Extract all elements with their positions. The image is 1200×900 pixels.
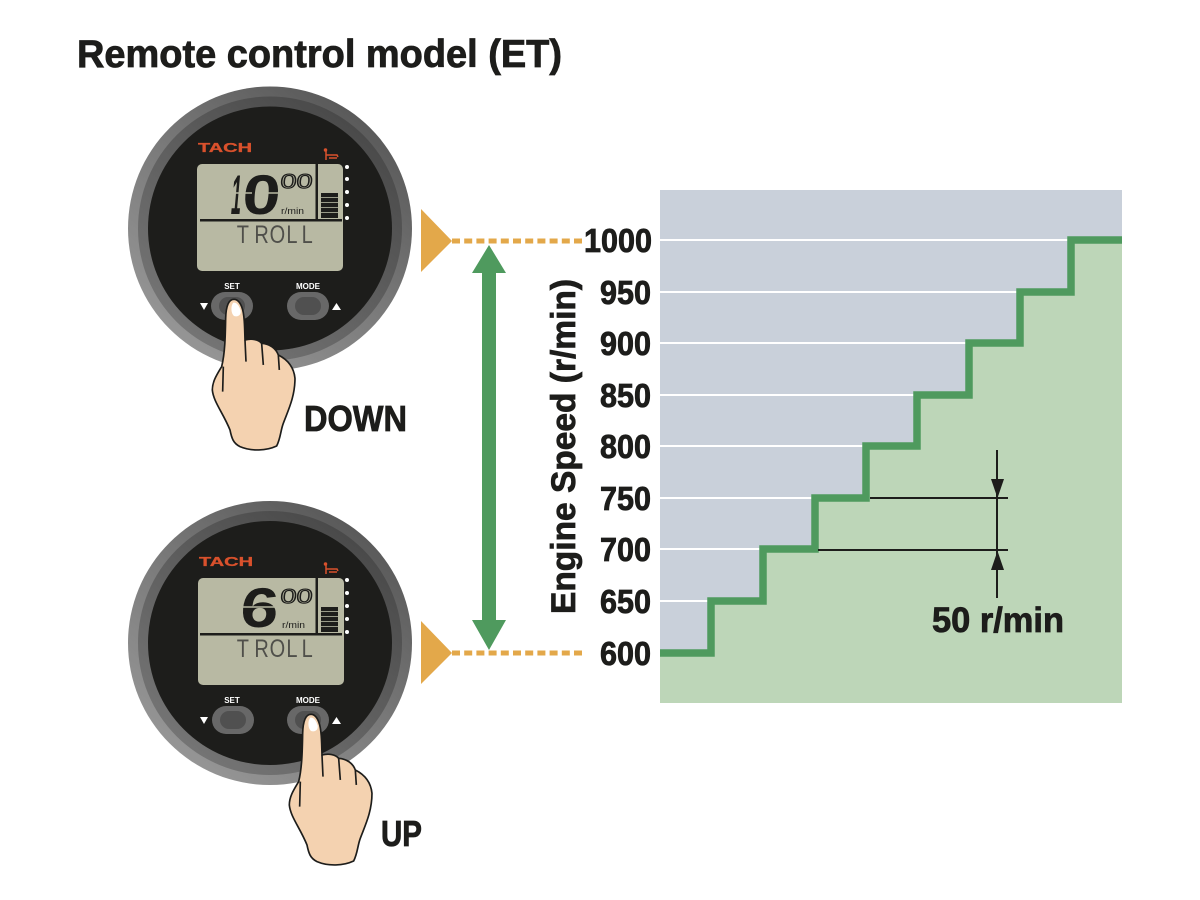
- y axis tick labels: 650: [600, 583, 651, 620]
- lcd small digits: 00: [280, 171, 313, 193]
- lcd screen: [197, 164, 343, 271]
- orange marker: 600: [421, 621, 583, 684]
- chart background: [660, 190, 1122, 703]
- icon: trim: [324, 149, 338, 160]
- set button: SET: [224, 696, 240, 705]
- indicator dots: [345, 165, 349, 220]
- area under the steps: [660, 240, 1122, 703]
- y axis tick labels: 800: [600, 428, 651, 465]
- y axis tick labels: 900: [600, 325, 651, 362]
- lcd dividers: [200, 578, 342, 636]
- lcd screen: [198, 578, 344, 685]
- mode button: [287, 696, 341, 734]
- lcd small digits: 00: [280, 586, 313, 608]
- label: up: UP: [381, 813, 422, 854]
- label: down: DOWN: [304, 398, 407, 439]
- lcd mode text: TROLL: [237, 635, 313, 663]
- chart: engine speed steps: [660, 190, 1122, 703]
- dimension callout: 50 r/min: [818, 450, 1064, 640]
- icon: hand pressing SET: [212, 299, 295, 450]
- mode button: MODE: [296, 696, 321, 705]
- lcd rpm digits: 1: [229, 163, 244, 226]
- tach label: TACH: [198, 140, 252, 155]
- y axis tick labels: 1000: [584, 222, 652, 259]
- stepped speed line: [660, 240, 1122, 653]
- chart grid lines: [660, 240, 1122, 601]
- mode button: MODE: [296, 282, 321, 291]
- orange marker: 1000: [421, 209, 583, 272]
- y axis tick labels: 850: [600, 377, 651, 414]
- green double arrow: [472, 245, 506, 650]
- indicator dots: [345, 578, 349, 634]
- lcd dividers: [200, 164, 342, 222]
- lcd unit: r/min: [281, 206, 304, 216]
- set button: [200, 696, 254, 734]
- lcd unit: r/min: [282, 620, 305, 630]
- y axis tick labels: [584, 222, 652, 672]
- lcd rpm digit: 6: [238, 576, 281, 639]
- gauge: bottom (600 r/min): [128, 501, 412, 785]
- lcd rpm digits: 0: [240, 163, 283, 226]
- y axis title: Engine Speed (r/min): [545, 279, 583, 614]
- y axis tick labels: 600: [600, 635, 651, 672]
- set button: [200, 282, 253, 320]
- tach label: TACH: [199, 554, 253, 569]
- y axis tick labels: 700: [600, 531, 651, 568]
- set button: SET: [224, 282, 240, 291]
- y axis tick labels: 950: [600, 274, 651, 311]
- y axis tick labels: 750: [600, 480, 651, 517]
- gauge: top (1000 r/min): [128, 86, 412, 370]
- mode button: [287, 282, 341, 320]
- title: Remote control model (ET): [77, 33, 562, 76]
- lcd bar meter: [321, 607, 338, 632]
- dimension callout: 50 r/min: 50 r/min: [932, 601, 1064, 640]
- lcd bar meter: [321, 193, 338, 218]
- icon: trim: [324, 563, 338, 574]
- lcd mode text: TROLL: [237, 221, 313, 249]
- icon: hand pressing MODE: [289, 714, 372, 865]
